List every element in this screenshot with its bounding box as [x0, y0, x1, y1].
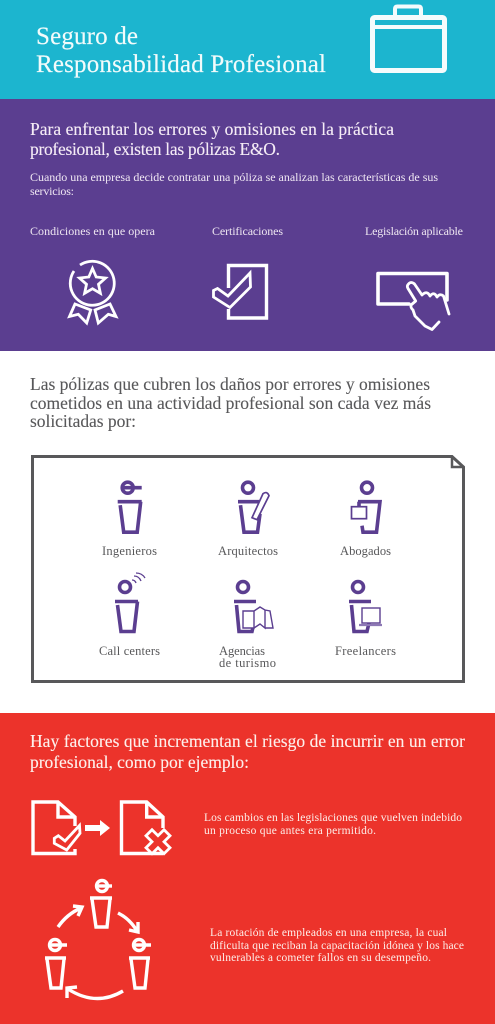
- heading: risk factors: Hay factores que incrementan el riesgo de incurrir en un error: [30, 731, 465, 751]
- icon: freelancer: [349, 582, 382, 632]
- heading: demand for policies: cometidos en una actividad profesional son cada vez más: [30, 393, 431, 413]
- text block: service analysis: [30, 170, 438, 198]
- icon: travel agency: [234, 582, 273, 632]
- icon: hand on touch screen: [378, 274, 449, 330]
- text block: employee rotation: dificulta que reciban la capacitación idónea y los hace: [210, 940, 464, 952]
- icon: lawyer: [352, 482, 380, 532]
- label: ingenieros: Ingenieros: [102, 544, 157, 558]
- label: agencias de turismo: de turismo: [219, 656, 276, 670]
- icon: arrow right: [85, 820, 110, 836]
- title: Seguro de: [36, 23, 138, 50]
- label: freelancers: Freelancers: [335, 644, 396, 658]
- label: condiciones: Condiciones en que opera: [30, 224, 156, 238]
- heading: risk factors: [30, 731, 465, 772]
- label: agencias de turismo: [219, 644, 276, 670]
- person: top: [90, 880, 112, 927]
- arrow: right to left: [67, 987, 123, 999]
- text block: employee rotation: La rotación de empleados en una empresa, la cual: [210, 927, 447, 939]
- heading: E&O policies: profesional, existen las pólizas E&O.: [30, 139, 280, 159]
- arrow: top to right: [118, 913, 138, 932]
- label: agencias de turismo: Agencias: [219, 644, 265, 658]
- heading: E&O policies: [30, 119, 394, 159]
- icon: architect: [238, 482, 269, 532]
- label: call centers: Call centers: [99, 644, 160, 658]
- icon: rejected document: [122, 802, 170, 854]
- icon: valid document: [33, 802, 80, 854]
- label: certificaciones: Certificaciones: [212, 224, 283, 238]
- icon: employee rotation: [45, 880, 151, 999]
- text block: legislation changes: [204, 812, 462, 837]
- arrow: left to top: [58, 906, 82, 927]
- text block: legislation changes: un proceso que antes era permitido.: [204, 825, 376, 837]
- panel: purple E&O section: [0, 99, 495, 351]
- panel: red risk factors: [0, 713, 495, 1024]
- text block: employee rotation: [210, 927, 464, 964]
- icon: briefcase: [372, 6, 445, 70]
- icon: medal with star: [70, 261, 116, 323]
- label: legislacion: Legislación aplicable: [365, 224, 463, 238]
- person: left: [45, 940, 67, 988]
- label: arquitectos: Arquitectos: [218, 544, 278, 558]
- label: abogados: Abogados: [340, 544, 391, 558]
- heading: demand for policies: Las pólizas que cubren los daños por errores y omisiones: [30, 374, 430, 394]
- heading: risk factors: profesional, como por ejemplo:: [30, 752, 249, 772]
- panel: professions card: [32, 456, 464, 682]
- panel: header: [0, 0, 495, 99]
- heading: demand for policies: [30, 374, 431, 431]
- text block: service analysis: servicios:: [30, 184, 74, 198]
- icon: document with check: [214, 266, 266, 318]
- text block: legislation changes: Los cambios en las legislaciones que vuelven indebido: [204, 812, 462, 824]
- icon: engineer: [118, 482, 142, 532]
- icon: call center: [115, 573, 145, 632]
- title: Responsabilidad Profesional: [36, 51, 326, 78]
- heading: demand for policies: solicitadas por:: [30, 411, 136, 431]
- heading: E&O policies: Para enfrentar los errores y omisiones en la práctica: [30, 119, 394, 139]
- person: right: [129, 940, 151, 988]
- text block: employee rotation: vulnerables a cometer fallos en su desempeño.: [210, 952, 431, 964]
- title: [36, 23, 326, 78]
- text block: service analysis: Cuando una empresa decide contratar una póliza se analizan las características de sus: [30, 170, 438, 184]
